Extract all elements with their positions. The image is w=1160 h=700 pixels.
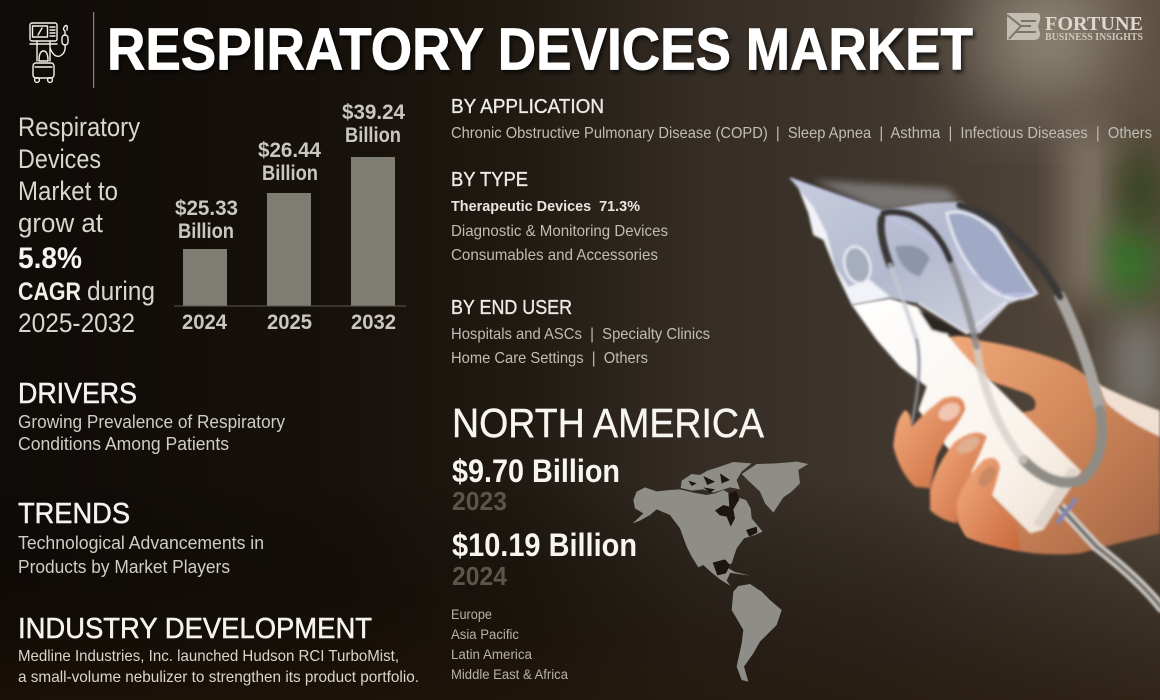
panel: North America: 2024 [452,561,508,591]
panel: trends [18,498,264,577]
text block: CAGR growth statement: Market to [18,176,118,206]
bar chart: market size: $39.24 [342,101,405,124]
logo: Fortune Business Insights: BUSINESS INSIGHTS [1045,32,1143,43]
panel: by type: Consumables and Accessories [451,247,658,264]
bar: 2032 [351,157,395,306]
panel: by type [451,169,668,264]
text block: CAGR growth statement: during [87,276,155,306]
panel: by end user: BY END USER [451,297,572,319]
bar chart: market size: 2025 [267,311,312,334]
panel: by end user: Hospitals and ASCs | Specialty Clinics [451,326,710,343]
list: other regions: Middle East & Africa [451,667,568,682]
panel: by type: BY TYPE [451,169,528,191]
bar: 2025 [267,193,311,306]
panel: North America: $9.70 Billion [452,453,620,489]
panel: drivers: Growing Prevalence of Respiratory [18,412,285,432]
panel: North America: NORTH AMERICA [452,400,765,446]
straps [881,205,1102,482]
text block: CAGR growth statement: Devices [18,144,101,174]
bar chart: market size: Billion [178,220,234,243]
text block: CAGR growth statement: Respiratory [18,112,140,142]
photo: hand holding nebulizer mask [790,178,1160,610]
panel: trends: Products by Market Players [18,557,230,577]
text block: CAGR growth statement: 2025-2032 [18,308,135,338]
bar: 2024 [183,249,227,306]
panel: drivers [18,378,285,454]
text block: CAGR growth statement: grow at [18,208,103,238]
bar chart: market size: 2032 [351,311,396,334]
panel: North America: 2023 [452,486,507,516]
logo: Fortune Business Insights: FORTUNE [1045,13,1143,35]
panel: North America: $10.19 Billion [452,527,637,563]
panel: trends: TRENDS [18,498,130,530]
list: other regions: Asia Pacific [451,627,519,642]
nebulizer body [852,298,1082,533]
mask shell [790,178,1037,333]
bar chart: market size: $25.33 [175,197,238,220]
map: Americas [633,462,808,682]
panel: industry development: a small-volume nebulizer to strengthen its product portfolio. [18,669,419,686]
list: other regions: Latin America [451,647,532,662]
bar chart: market size [174,101,406,334]
text block: CAGR growth statement: 5.8% [18,242,82,275]
icon: ventilator machine [30,23,68,82]
text block: CAGR growth statement: CAGR [18,278,81,306]
panel: industry development [18,613,419,686]
panel: by application: BY APPLICATION [451,96,604,118]
panel: trends: Technological Advancements in [18,533,264,553]
panel: industry development: INDUSTRY DEVELOPMENT [18,613,372,645]
panel: drivers: DRIVERS [18,378,137,410]
panel: drivers: Conditions Among Patients [18,434,229,454]
logo: Fortune Business Insights [1007,13,1143,43]
panel: industry development: Medline Industries, Inc. launched Hudson RCI TurboMist, [18,648,399,665]
fingers [893,397,1020,550]
list: other regions [451,607,568,682]
panel: by application [451,96,1152,142]
tube [1057,498,1160,610]
panel: by type: Therapeutic Devices 71.3% [451,198,640,215]
panel: by end user: Home Care Settings | Others [451,350,648,367]
panel: by end user [451,297,710,367]
list: other regions: Europe [451,607,492,622]
text block: CAGR growth statement [18,112,155,338]
panel: North America [452,400,765,591]
panel: by type: Diagnostic & Monitoring Devices [451,223,668,240]
palm and forearm [945,336,1160,554]
bar chart: market size: $26.44 [258,139,321,162]
divider [93,12,94,88]
bar chart: market size: Billion [262,162,318,185]
bar chart: market size: Billion [345,124,401,147]
bar chart: market size: 2024 [182,311,227,334]
title: RESPIRATORY DEVICES MARKET [107,16,973,82]
